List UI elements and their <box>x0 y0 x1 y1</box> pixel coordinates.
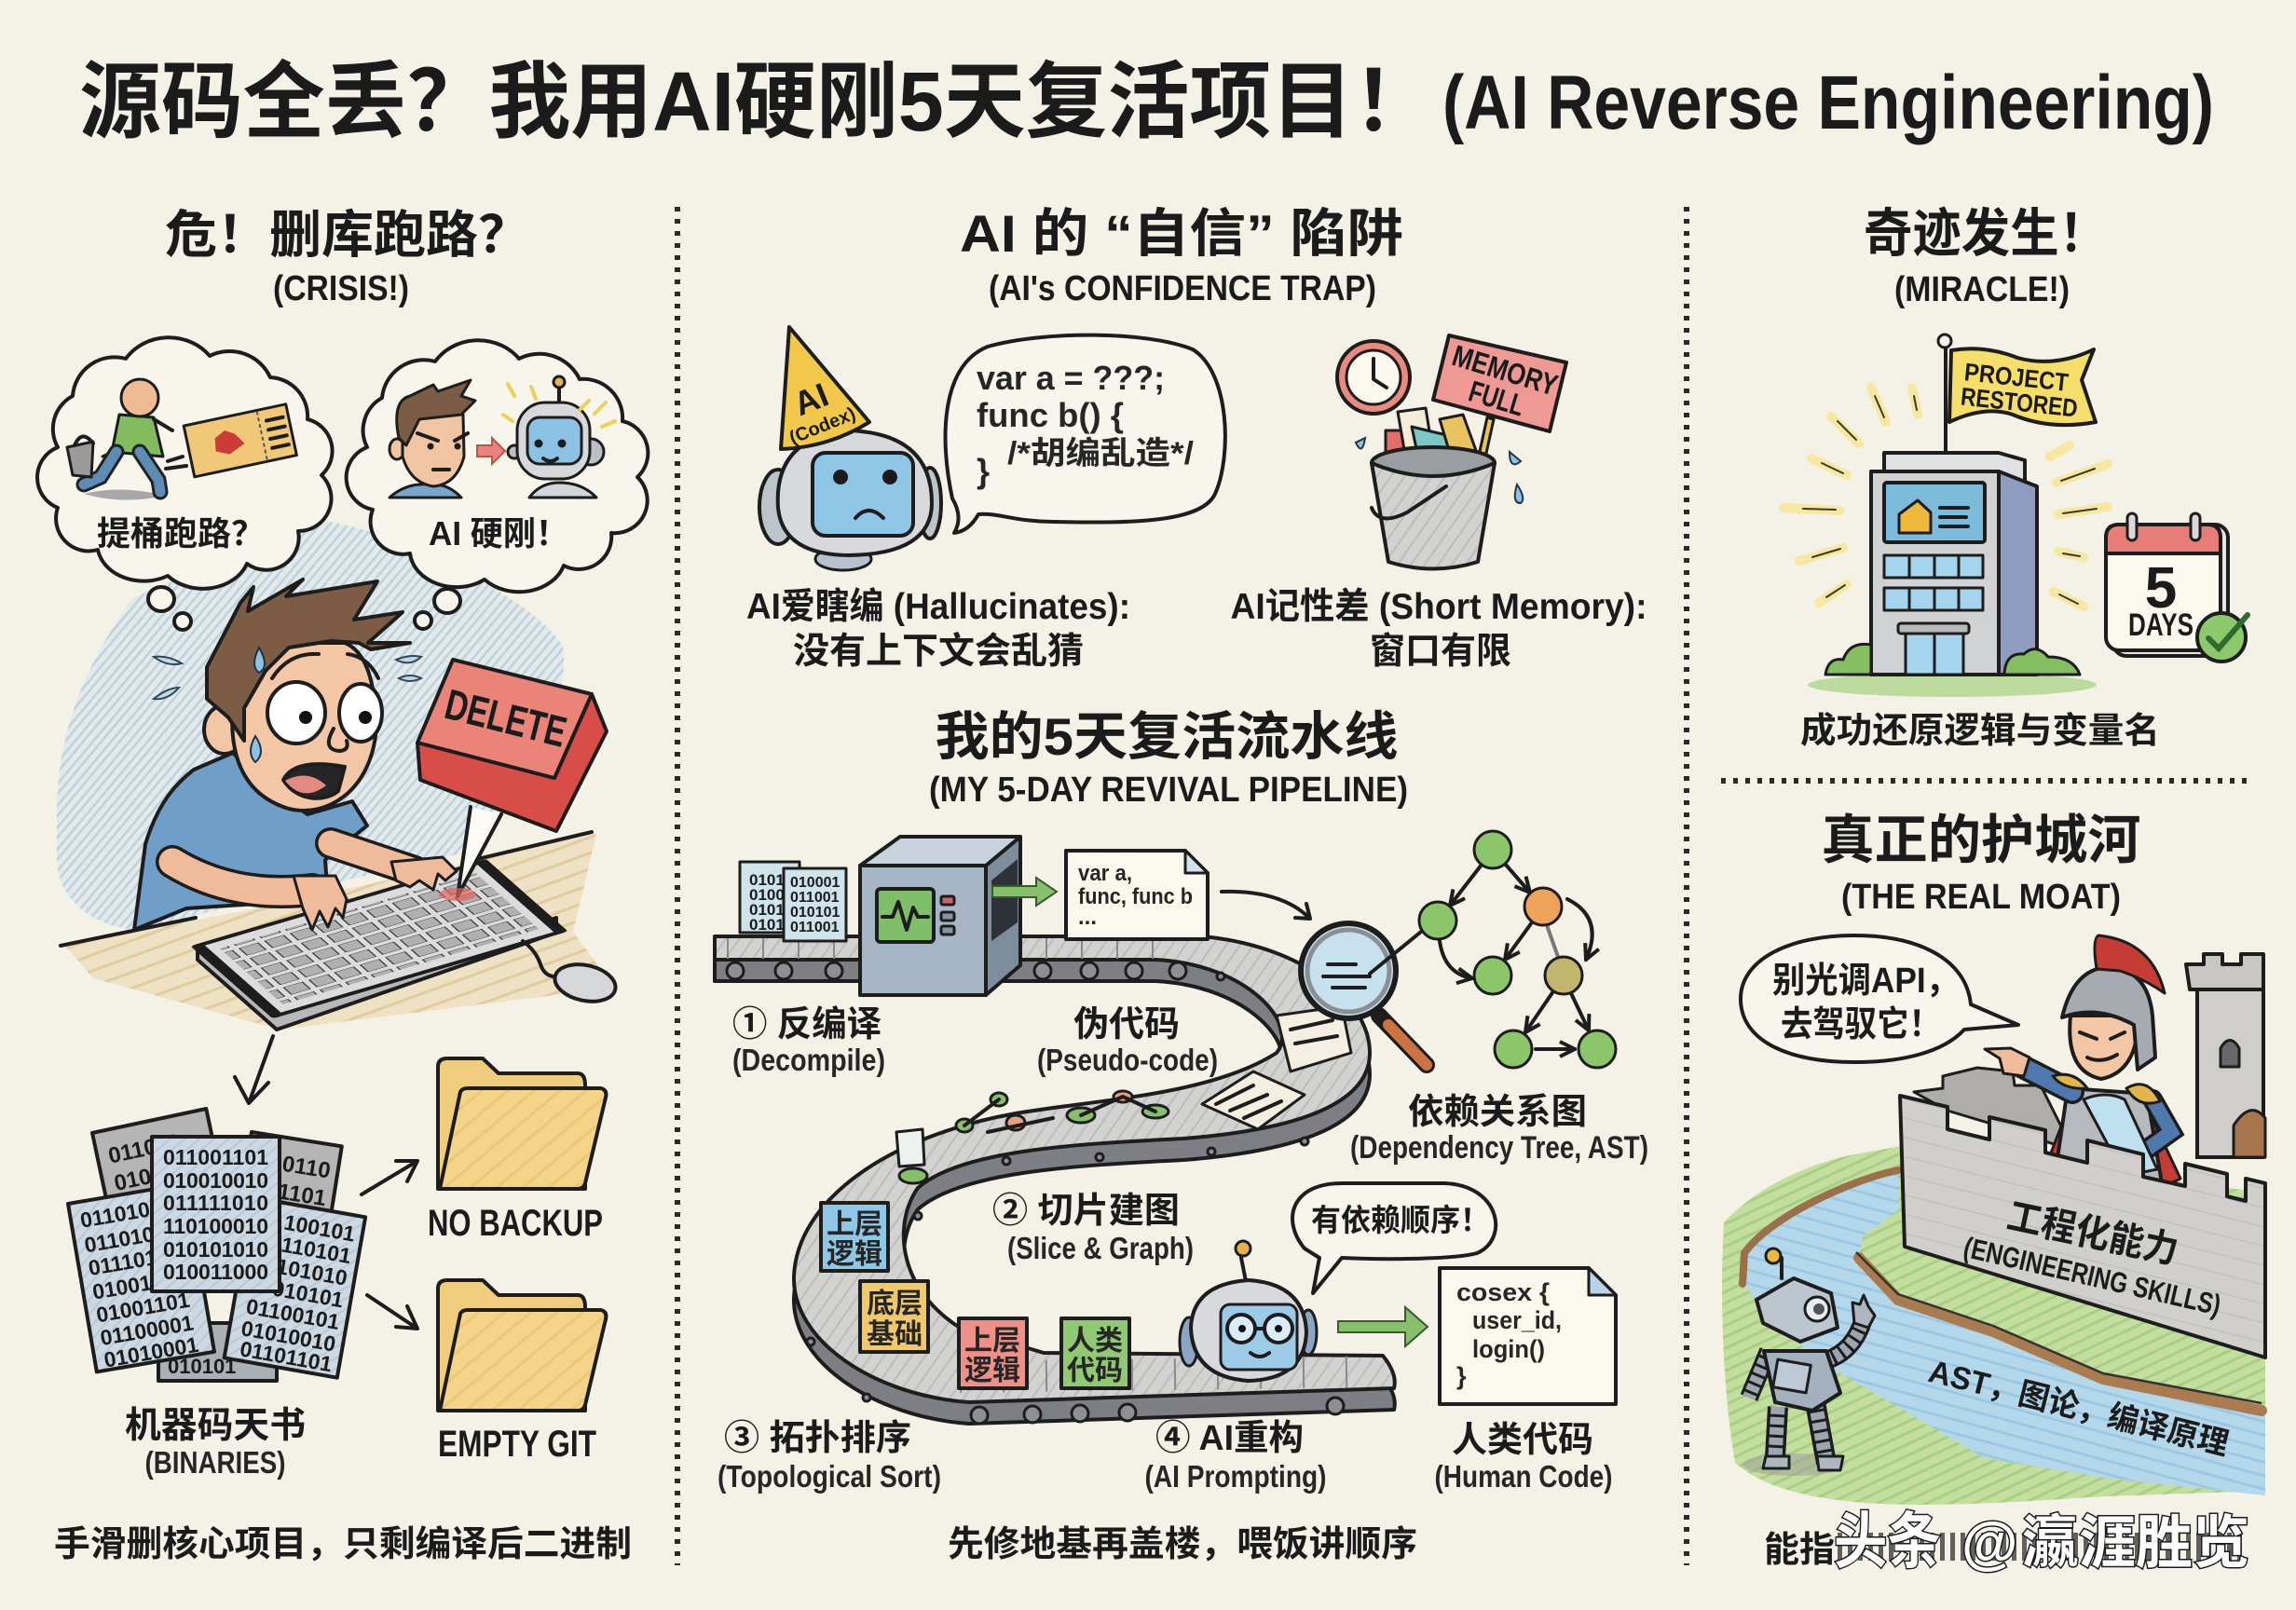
curved arrow to magnifier <box>1222 892 1310 919</box>
label: step 3 topological sort: ③ 拓扑排序 <box>724 1419 911 1458</box>
binary cards: 0101 <box>749 916 785 934</box>
speech bubble: fake code: /*胡编乱造*/ <box>1007 436 1195 471</box>
heading: pipeline: (MY 5-DAY REVIVAL PIPELINE) <box>929 771 1408 810</box>
caption: hallucinates <box>746 587 1130 672</box>
binary cards: 0101 <box>749 871 785 889</box>
block: upper logic red <box>959 1318 1027 1388</box>
icon: overflowing bucket with memory sign <box>1356 335 1566 568</box>
speech bubble: has dependency order <box>1292 1183 1496 1293</box>
heading: crisis: 危！删库跑路？ <box>165 206 530 264</box>
binary sheet: left: 0110101 <box>83 1220 168 1257</box>
heading: pipeline <box>929 707 1408 810</box>
pseudo-code document: func, func b <box>1078 884 1193 909</box>
icon: overflowing bucket with memory sign: FULL <box>1465 374 1528 422</box>
label: dependency tree <box>1350 1093 1648 1166</box>
binary sheet: left: 01100001 <box>99 1310 196 1350</box>
label: step 1 decompile: ① 反编译 <box>732 1005 882 1044</box>
decompiler machine <box>860 837 1020 995</box>
binary sheet: center: 011001101 <box>163 1145 268 1169</box>
heading: miracle <box>1864 204 2108 309</box>
binary sheet: left: 0110101 <box>78 1194 164 1233</box>
binary sheet: bottom: 010101 <box>168 1355 236 1378</box>
wall label: engineering skills <box>1961 1195 2224 1322</box>
panel: crisis <box>37 206 648 1564</box>
binary sheet: back left: 0101 <box>112 1161 166 1196</box>
arrow: robot to human code <box>1338 1307 1428 1346</box>
binary cards: 010001 <box>790 875 840 891</box>
flag: project restored: RESTORED <box>1960 383 2079 423</box>
speech bubble: fake code: func b() { <box>977 396 1124 434</box>
panel: miracle <box>1784 204 2248 751</box>
caption: hallucinates: AI爱瞎编 (Hallucinates): <box>746 587 1130 627</box>
icon: 5 days calendar <box>2106 513 2248 662</box>
desk <box>65 834 615 1030</box>
binary sheet: center: 011111010 <box>163 1191 268 1215</box>
human code document <box>1440 1268 1616 1404</box>
caption: short memory <box>1230 587 1647 672</box>
icon: torn ticket <box>184 404 296 477</box>
block: human code green: 代码 <box>1067 1356 1123 1386</box>
binary sheet: right: 110101 <box>280 1232 353 1268</box>
label: pseudo-code: 伪代码 <box>1073 1005 1180 1044</box>
thought cloud: run away: 提桶跑路？ <box>97 514 265 553</box>
speech bubble: has dependency order: 有依赖顺序！ <box>1311 1203 1490 1237</box>
title <box>79 56 2214 149</box>
label: binaries: 机器码天书 <box>125 1406 306 1446</box>
arrow to no backup <box>362 1161 417 1194</box>
river moat <box>1741 1170 2265 1495</box>
bushes <box>1825 644 2080 675</box>
heading: crisis: (CRISIS!) <box>273 269 409 308</box>
panel: real moat <box>1722 811 2265 1576</box>
label: step 4 AI prompting: ④ AI重构 <box>1155 1419 1304 1458</box>
label: step 3 topological sort <box>718 1419 941 1494</box>
label: binaries <box>125 1406 306 1480</box>
binary cards: 010101 <box>790 905 840 921</box>
speech bubble: fake code <box>946 335 1225 533</box>
watermark: @ <box>1961 1511 2017 1576</box>
caption: short memory: AI记性差 (Short Memory): <box>1230 587 1647 627</box>
label: dependency tree: 依赖关系图 <box>1408 1093 1587 1132</box>
thought cloud: AI hard fight: AI 硬刚！ <box>429 514 568 553</box>
label: empty git: EMPTY GIT <box>438 1424 596 1465</box>
icon: 5 days calendar: 5 <box>2145 556 2177 621</box>
watermark: 头条 <box>1834 1507 1941 1576</box>
caption: crisis: 手滑删核心项目，只剩编译后二进制 <box>54 1525 632 1564</box>
label: pseudo-code <box>1037 1005 1218 1077</box>
thought cloud: run away <box>37 337 333 589</box>
icon: overflowing bucket with memory sign: MEMORY <box>1448 338 1562 402</box>
block: foundation yellow: 底层 <box>867 1289 922 1319</box>
dependency tree <box>1370 831 1616 1068</box>
heading: confidence trap: AI 的 “自信” 陷阱 <box>960 204 1403 263</box>
icon: robot with dunce cap: AI <box>788 375 834 423</box>
block: upper logic blue: 逻辑 <box>827 1239 882 1270</box>
heading: crisis <box>165 206 530 308</box>
ground <box>1808 673 2097 697</box>
block: human code green <box>1061 1318 1129 1388</box>
wall label: engineering skills: 工程化能力 <box>2003 1195 2181 1272</box>
label: step 2 slice and graph <box>992 1192 1194 1265</box>
binaries stack <box>68 1109 365 1381</box>
icon: robot with dunce cap <box>759 327 941 570</box>
binary sheet: back right: 1101 <box>276 1179 328 1211</box>
heading: confidence trap <box>960 204 1403 308</box>
heading: miracle: (MIRACLE!) <box>1894 270 2070 309</box>
block: upper logic red: 逻辑 <box>964 1356 1020 1386</box>
binary sheet: right: 010101 <box>270 1276 346 1312</box>
keyboard <box>198 862 561 1030</box>
speech bubble: fake code: var a = ???; <box>977 359 1165 397</box>
label: step 2 slice and graph: (Slice & Graph) <box>1007 1231 1194 1265</box>
speech bubble: fake code: } <box>977 452 990 490</box>
block: human code green: 人类 <box>1067 1326 1123 1357</box>
caption: moat, mostly hidden by watermark: 能指 <box>1764 1531 1835 1570</box>
icon: DELETE key <box>417 660 607 831</box>
binary sheet: back left: 011011 <box>106 1129 182 1169</box>
heading: miracle: 奇迹发生！ <box>1864 204 2108 263</box>
label: step 3 topological sort: (Topological Sort) <box>718 1459 941 1494</box>
binary sheet: right: 01010010 <box>239 1316 337 1357</box>
icon: folder no backup <box>438 1058 606 1189</box>
hands on keyboard <box>294 857 457 930</box>
binary sheet: center: 010010010 <box>163 1168 268 1193</box>
pseudo-code document <box>1066 851 1208 939</box>
binary sheet: back left: 0100 <box>117 1189 171 1223</box>
icon: 5 days calendar: DAYS <box>2128 607 2194 643</box>
binary sheet: back right: 0110 <box>280 1152 333 1184</box>
green land <box>1722 1146 2265 1505</box>
human code document: cosex { <box>1456 1278 1550 1306</box>
binary sheet: right: 01100101 <box>244 1294 342 1334</box>
caption: short memory: 窗口有限 <box>1370 632 1511 672</box>
label: step 4 AI prompting: (AI Prompting) <box>1144 1459 1327 1494</box>
river label: AST，图论，编译原理 <box>1925 1354 2232 1463</box>
heading: confidence trap: (AI's CONFIDENCE TRAP) <box>989 269 1376 308</box>
mouse <box>523 941 619 1006</box>
binary sheet: center <box>152 1137 280 1291</box>
binary sheet: back left <box>92 1109 235 1270</box>
flag: project restored: PROJECT <box>1963 358 2070 397</box>
label: step 2 slice and graph: ② 切片建图 <box>992 1192 1180 1231</box>
binary cards: 011001 <box>790 890 840 906</box>
wall label: engineering skills: (ENGINEERING SKILLS) <box>1961 1231 2224 1322</box>
binary sheet: back right <box>237 1132 342 1238</box>
binary cards: 0100 <box>749 886 785 904</box>
binary sheet: center: 010011000 <box>163 1260 268 1284</box>
caption: pipeline: 先修地基再盖楼，喂饭讲顺序 <box>948 1525 1417 1564</box>
caption: hallucinates: 没有上下文会乱猜 <box>793 632 1084 672</box>
block: foundation yellow <box>860 1281 928 1352</box>
label: human code <box>1435 1421 1612 1494</box>
binary cards: 0101 <box>749 901 785 919</box>
binary sheet: left: 010011 <box>90 1268 164 1304</box>
label: binaries: (BINARIES) <box>145 1445 285 1480</box>
binary sheet: right: 01101101 <box>239 1336 335 1376</box>
binary sheet: left <box>68 1183 214 1373</box>
heading: real moat: (THE REAL MOAT) <box>1841 878 2121 917</box>
binary sheet: center: 010101010 <box>163 1237 268 1262</box>
binary sheet: right <box>225 1197 365 1378</box>
icon: arrow to robot <box>477 438 505 464</box>
label: step 1 decompile: (Decompile) <box>732 1043 885 1077</box>
pseudo-code document: ... <box>1078 905 1097 930</box>
binary sheet: right: 101010 <box>275 1254 349 1290</box>
flag: project restored <box>1949 348 2096 425</box>
icon: clock <box>1337 341 1410 414</box>
arrow down <box>235 1036 273 1103</box>
block: upper logic blue: 上层 <box>827 1209 882 1240</box>
building with restored flag <box>1871 334 2096 675</box>
watermark <box>1834 1507 2249 1576</box>
arrow: machine to pseudo-code <box>992 878 1057 906</box>
label: human code: (Human Code) <box>1435 1459 1612 1494</box>
icon: determined man <box>390 380 475 498</box>
heading: pipeline: 我的5天复活流水线 <box>936 707 1398 766</box>
speech bubble: drive it: 去驾驭它！ <box>1781 1005 1941 1044</box>
panel: confidence trap <box>746 204 1647 672</box>
icon: robot with glasses <box>1180 1241 1317 1381</box>
icon: robot smiling <box>503 376 615 498</box>
binary sheet: left: 01001101 <box>94 1288 192 1327</box>
conveyor belt <box>715 936 1395 1424</box>
binary sheet: bottom <box>158 1323 277 1381</box>
label: pseudo-code: (Pseudo-code) <box>1037 1043 1218 1077</box>
block: upper logic blue <box>821 1203 888 1271</box>
block: upper logic red: 上层 <box>964 1326 1020 1357</box>
binary sheet: center: 110100010 <box>163 1214 268 1238</box>
icon: folder empty git <box>438 1280 606 1411</box>
belt cargo: paper scraps and nodes <box>896 1006 1351 1183</box>
human code document: user_id, <box>1472 1306 1562 1334</box>
watermark: 瀛涯胜览 <box>2022 1511 2249 1576</box>
label: no backup: NO BACKUP <box>428 1203 603 1244</box>
human code document: login() <box>1472 1335 1545 1363</box>
blue scribble background <box>57 518 564 930</box>
castle back wall <box>1914 1068 2073 1151</box>
arrow to empty git <box>367 1295 417 1329</box>
small robot waving <box>1742 1248 1875 1476</box>
knight commander <box>1985 935 2180 1189</box>
icon: robot with dunce cap: (Codex) <box>786 403 858 449</box>
thought cloud: AI hard fight <box>347 340 648 592</box>
caption: miracle: 成功还原逻辑与变量名 <box>1800 712 2160 751</box>
title: 源码全丢？我用AI硬刚5天复活项目！ <box>79 56 1435 149</box>
binary sheet: right: 100101 <box>282 1210 357 1247</box>
human code document: } <box>1456 1362 1467 1390</box>
label: step 1 decompile <box>732 1005 885 1077</box>
icon: DELETE key: DELETE <box>441 679 571 757</box>
castle front wall <box>1900 1096 2265 1358</box>
thought bubbles <box>148 587 460 630</box>
binary sheet: left: 01010001 <box>102 1332 200 1372</box>
panel: pipeline <box>715 707 1648 1564</box>
magnifying glass <box>1301 923 1427 1065</box>
icon: running man with bucket <box>67 379 186 500</box>
pseudo-code document: var a, <box>1078 861 1132 886</box>
label: human code: 人类代码 <box>1452 1421 1593 1460</box>
block: foundation yellow: 基础 <box>867 1319 922 1350</box>
label: step 4 AI prompting <box>1144 1419 1327 1494</box>
binary cards <box>740 862 846 941</box>
speech bubble: drive it <box>1741 935 2018 1062</box>
light rays <box>1784 388 2108 607</box>
binary sheet: left: 011101 <box>87 1245 159 1280</box>
label: dependency tree: (Dependency Tree, AST) <box>1350 1130 1648 1166</box>
key press burst <box>439 807 501 901</box>
speech bubble: drive it: 别光调API， <box>1772 962 1959 1001</box>
panicked developer <box>134 580 421 930</box>
heading: real moat: 真正的护城河 <box>1821 811 2141 870</box>
castle tower <box>2186 954 2265 1157</box>
heading: real moat <box>1821 811 2141 917</box>
binary cards: 011001 <box>790 920 840 935</box>
